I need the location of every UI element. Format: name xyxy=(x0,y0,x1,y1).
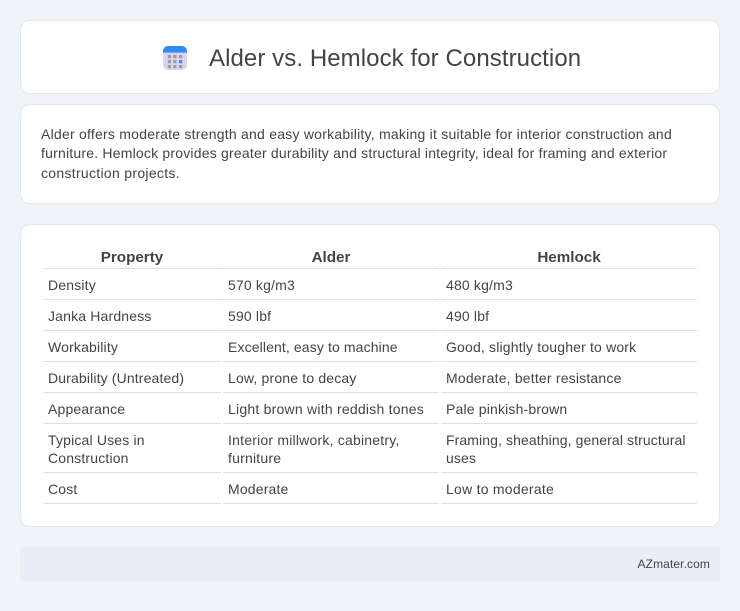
row: workability xyxy=(48,339,636,355)
row: typical uses: Interior millwork, cabinetry, xyxy=(228,432,400,448)
column headers xyxy=(101,249,601,266)
column headers: Property xyxy=(101,249,163,266)
header panel xyxy=(20,20,720,94)
row: typical uses xyxy=(48,432,686,466)
row: cost: Low to moderate xyxy=(446,481,554,497)
row: appearance xyxy=(48,401,567,417)
row: janka hardness xyxy=(48,308,490,324)
row: janka hardness: 490 lbf xyxy=(446,308,489,324)
row: durability: Durability (Untreated) xyxy=(48,370,184,386)
icon: calendar xyxy=(163,46,187,70)
row: durability xyxy=(48,370,622,386)
row: density: 570 kg/m3 xyxy=(228,277,295,293)
row: typical uses: furniture xyxy=(228,450,281,466)
row: janka hardness: 590 lbf xyxy=(228,308,271,324)
row: density: 480 kg/m3 xyxy=(446,277,513,293)
row: janka hardness: Janka Hardness xyxy=(48,308,152,324)
row: appearance: Light brown with reddish tones xyxy=(228,401,424,417)
row: workability: Excellent, easy to machine xyxy=(228,339,398,355)
row: cost: Cost xyxy=(48,481,77,497)
footer text: AZmater.com xyxy=(638,557,710,571)
title: Alder vs. Hemlock for Construction xyxy=(209,45,581,72)
summary text xyxy=(41,126,672,181)
row: cost: Moderate xyxy=(228,481,289,497)
row: durability: Moderate, better resistance xyxy=(446,370,622,386)
row: density: Density xyxy=(48,277,96,293)
row: appearance: Appearance xyxy=(48,401,125,417)
row: typical uses: Typical Uses in xyxy=(48,432,145,448)
panel: summary xyxy=(20,104,720,204)
row: typical uses: uses xyxy=(446,450,476,466)
summary text: Alder offers moderate strength and easy workability, making it suitable for interior construction and xyxy=(41,126,672,142)
row: appearance: Pale pinkish-brown xyxy=(446,401,567,417)
summary text: construction projects. xyxy=(41,165,180,181)
row: workability: Good, slightly tougher to work xyxy=(446,339,636,355)
summary text: furniture. Hemlock provides greater durability and structural integrity, ideal for framing and exterior xyxy=(41,144,667,160)
panel: comparison table xyxy=(20,224,720,527)
column headers: Alder xyxy=(312,249,350,266)
column headers: Hemlock xyxy=(537,249,601,266)
row: typical uses: Construction xyxy=(48,450,129,466)
row: workability: Workability xyxy=(48,339,118,355)
footer bar xyxy=(20,547,720,581)
row: durability: Low, prone to decay xyxy=(228,370,357,386)
comparison table xyxy=(43,249,697,504)
row: density xyxy=(48,277,513,293)
row: cost xyxy=(48,481,554,497)
row: typical uses: Framing, sheathing, general structural xyxy=(446,432,686,448)
